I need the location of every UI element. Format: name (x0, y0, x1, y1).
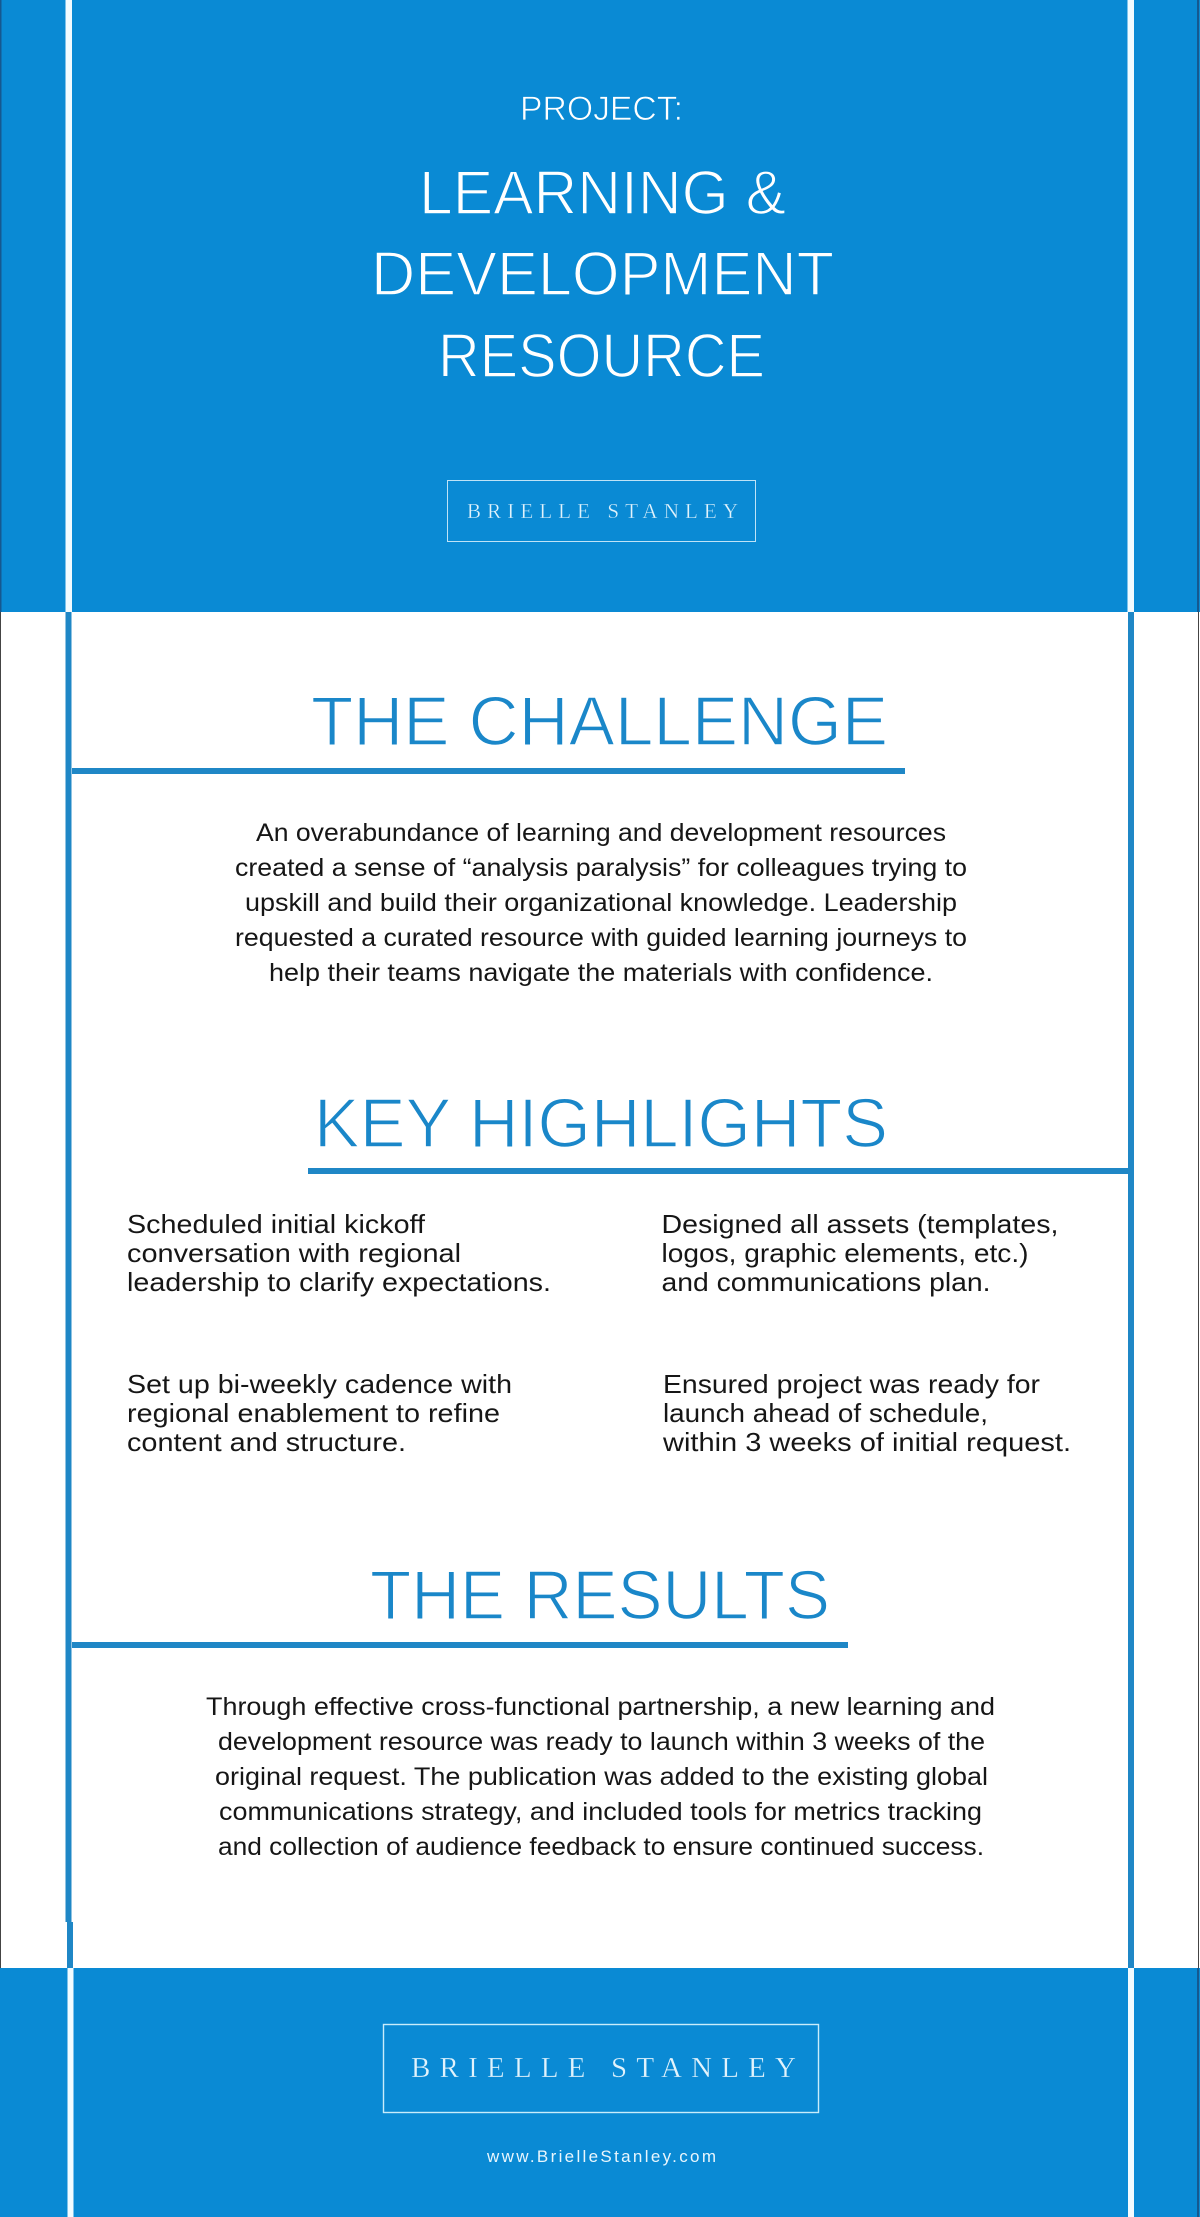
highlight: assets: logos, graphic elements, etc.) (662, 1238, 1028, 1268)
highlight: cadence (127, 1369, 512, 1457)
logo box: Brielle Stanley (448, 480, 756, 542)
highlight: launch: launch ahead of schedule, (663, 1398, 988, 1428)
text block: challenge body (235, 819, 967, 987)
title: LEARNING & (419, 159, 786, 228)
text block: results body: Through effective cross-functional partnership, a new learning and (206, 1693, 995, 1721)
highlight: cadence: regional enablement to refine (127, 1398, 500, 1428)
logo box: Brielle Stanley: BRIELLE STANLEY (467, 499, 738, 523)
highlight: assets: Designed all assets (templates, (662, 1209, 1058, 1239)
highlight: kickoff (127, 1209, 551, 1297)
right vertical rule (1128, 612, 1134, 1968)
section: the challenge (72, 682, 967, 987)
logo box: Brielle Stanley (384, 2024, 818, 2112)
title: RESOURCE (438, 322, 765, 391)
panel: header band (0, 0, 1200, 612)
heading: the results: THE RESULTS (370, 1556, 830, 1634)
text block: challenge body: upskill and build their organizational knowledge. Leadership (245, 889, 957, 917)
title (371, 159, 834, 391)
highlight: assets (662, 1209, 1058, 1297)
section: key highlights (127, 1084, 1130, 1457)
highlight: kickoff: Scheduled initial kickoff (127, 1209, 426, 1239)
text block: challenge body: An overabundance of learning and development resources (256, 819, 946, 847)
heading underline (308, 1168, 1130, 1174)
left vertical rule lower (67, 1922, 73, 1968)
heading underline (72, 768, 905, 774)
text block: challenge body: help their teams navigate the materials with confidence. (269, 959, 933, 987)
page edge line left (0, 612, 1, 1968)
heading: key highlights: KEY HIGHLIGHTS (314, 1084, 888, 1162)
text block: challenge body: created a sense of “analysis paralysis” for colleagues trying to (235, 854, 967, 882)
left vertical rule (66, 612, 72, 1922)
highlight: launch: within 3 weeks of initial request. (662, 1427, 1071, 1457)
highlight: launch (662, 1369, 1071, 1457)
heading underline (72, 1642, 848, 1648)
text block: challenge body: requested a curated resource with guided learning journeys to (235, 924, 967, 952)
highlight: launch: Ensured project was ready for (663, 1369, 1040, 1399)
highlight: kickoff: conversation with regional (127, 1238, 461, 1268)
page edge line right (1198, 612, 1199, 1968)
website url: www.BrielleStanley.com (486, 2147, 716, 2166)
text block: results body: original request. The publication was added to the existing global (215, 1763, 988, 1791)
highlight: cadence: Set up bi-weekly cadence with (127, 1369, 512, 1399)
header eyebrow: project: PROJECT: (520, 90, 683, 128)
panel: footer band (0, 1968, 1200, 2217)
heading: the challenge: THE CHALLENGE (311, 682, 888, 760)
section: the results (72, 1556, 995, 1861)
text block: results body: and collection of audience feedback to ensure continued success. (218, 1833, 984, 1861)
title: DEVELOPMENT (371, 240, 834, 309)
logo box: Brielle Stanley: BRIELLE STANLEY (411, 2052, 796, 2084)
text block: results body: communications strategy, and included tools for metrics tracking (219, 1798, 982, 1826)
text block: results body: development resource was ready to launch within 3 weeks of the (218, 1728, 985, 1756)
highlight: assets: and communications plan. (662, 1267, 990, 1297)
highlight: cadence: content and structure. (127, 1427, 406, 1457)
text block: results body (206, 1693, 995, 1861)
highlight: kickoff: leadership to clarify expectations. (127, 1267, 551, 1297)
